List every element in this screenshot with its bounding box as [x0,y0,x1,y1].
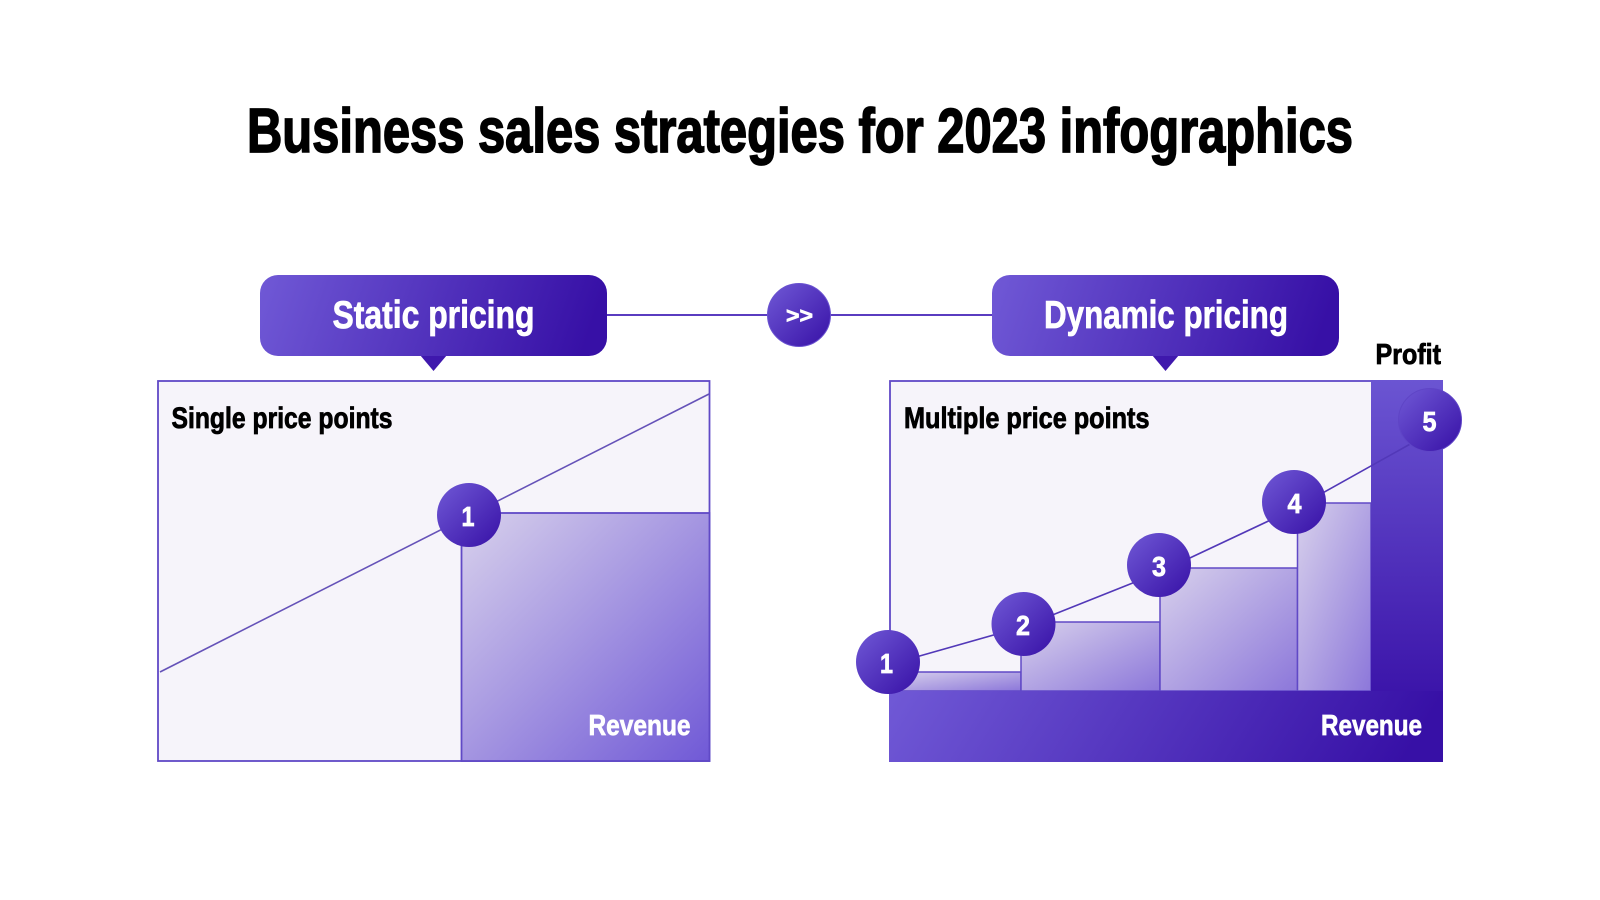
icon: arrow badge [768,284,830,346]
point 1 [437,483,501,547]
price steps [889,503,1371,691]
point 4: 4 [1288,488,1302,519]
point 3: 3 [1152,551,1166,582]
profit column [1371,380,1443,691]
point 4 [1262,470,1326,534]
point 2 [992,592,1056,656]
revenue area: Revenue [588,710,690,742]
heading: static pricing [260,275,607,371]
chart: single price point [158,381,710,761]
revenue area [462,513,710,761]
panel: dynamic pricing [856,275,1462,762]
point 2: 2 [1016,610,1030,641]
connector line between pricing headers [607,314,992,316]
chart: multiple price points [856,380,1462,762]
heading: dynamic pricing: Dynamic pricing [1044,294,1288,337]
point 1: 1 [462,501,474,532]
icon: arrow badge: >> [786,303,813,328]
label: profit: Profit [1376,339,1441,371]
point 1: 1 [880,648,893,679]
revenue band: Revenue [1321,710,1422,742]
revenue band [889,691,1443,762]
price line [888,433,1430,665]
point 3 [1127,533,1191,597]
point 5 [1398,388,1462,452]
text: single price points: Single price points [172,402,392,435]
point 5: 5 [1422,406,1436,437]
price line [160,394,709,672]
heading: static pricing: Static pricing [332,294,534,337]
panel: static pricing [158,275,710,761]
heading: dynamic pricing [992,275,1339,371]
point 1 [856,630,920,694]
text: multiple price points: Multiple price points [904,402,1150,435]
